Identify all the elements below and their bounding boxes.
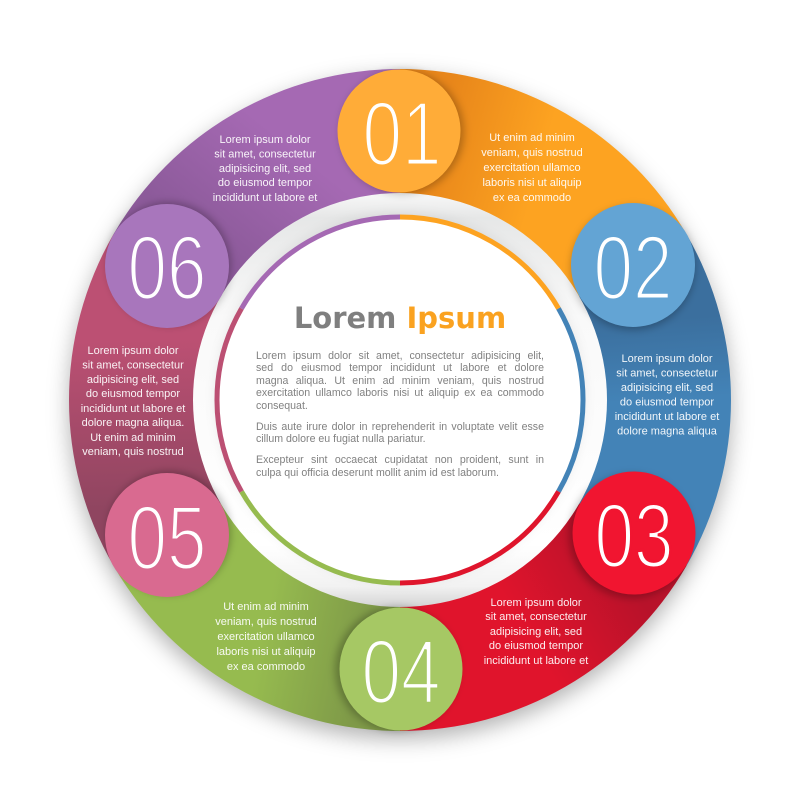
segment text: purple: adipisicing elit, sed xyxy=(219,163,311,175)
badge 06: 06 xyxy=(128,218,206,319)
segment: maroon xyxy=(69,234,222,566)
segment text: purple: incididunt ut labore et xyxy=(213,192,317,204)
centre body text: consequat. xyxy=(256,400,308,412)
segment: green xyxy=(113,503,400,731)
segment text: red: do eiusmod tempor xyxy=(489,640,583,652)
badge 03 xyxy=(569,472,696,598)
badge 03: 03 xyxy=(595,486,673,587)
segment: orange xyxy=(400,69,687,297)
segment text: maroon: adipisicing elit, sed xyxy=(87,374,179,386)
ring drop shadow xyxy=(69,77,731,739)
segment text: blue: incididunt ut labore et xyxy=(615,411,719,423)
segment text: orange: veniam, quis nostrud xyxy=(481,147,583,159)
badge 02 xyxy=(571,203,695,330)
segment text: green: veniam, quis nostrud xyxy=(215,616,317,628)
segment text: blue: sit amet, consectetur xyxy=(616,368,718,380)
segment: blue xyxy=(578,234,731,566)
segment text: blue: adipisicing elit, sed xyxy=(621,382,713,394)
title: Lorem Ipsum xyxy=(294,301,506,335)
centre body text: magna aliqua. Ut enim ad minim veniam, quis nostrud xyxy=(256,375,544,387)
badge 04: 04 xyxy=(362,622,440,723)
segment text: maroon: veniam, quis nostrud xyxy=(82,446,184,458)
segment text: red: incididunt ut labore et xyxy=(484,655,588,667)
coloured inner ring xyxy=(217,217,583,583)
segment text: orange: Ut enim ad minim xyxy=(489,132,575,144)
segment text: maroon: Ut enim ad minim xyxy=(90,432,176,444)
centre body text: Excepteur sint occaecat cupidatat non proident, sunt in xyxy=(256,454,544,466)
segment text: green: ex ea commodo xyxy=(227,661,305,673)
badge 01: 01 xyxy=(363,84,441,185)
centre body text: exercitation ullamco laboris nisi ut aliquip ex ea commodo xyxy=(256,387,544,399)
badge 05: 05 xyxy=(128,488,206,589)
segment text: orange: exercitation ullamco xyxy=(483,162,581,174)
segment text: blue: do eiusmod tempor xyxy=(620,396,714,408)
segment text: green: exercitation ullamco xyxy=(217,631,315,643)
segment text: purple: sit amet, consectetur xyxy=(214,148,316,160)
badge 05 xyxy=(105,471,231,597)
central white disk xyxy=(193,193,607,607)
segment text: blue: Lorem ipsum dolor xyxy=(621,353,713,365)
centre body text: Lorem ipsum dolor sit amet, consectetur adipisicing elit, xyxy=(256,350,544,362)
segment text: purple: Lorem ipsum dolor xyxy=(219,134,311,146)
badge 01 xyxy=(338,70,464,194)
segment: purple xyxy=(113,69,400,297)
segment ring xyxy=(69,69,731,731)
segment text: maroon: sit amet, consectetur xyxy=(82,360,184,372)
segment text: orange: laboris nisi ut aliquip xyxy=(482,177,582,189)
segment text: red: Lorem ipsum dolor xyxy=(490,597,582,609)
segment text: green: Ut enim ad minim xyxy=(223,601,309,613)
segment text: green: laboris nisi ut aliquip xyxy=(216,646,316,658)
centre body text: sed do eiusmod tempor incididunt ut labore et dolore xyxy=(256,362,544,374)
badge 02: 02 xyxy=(594,218,672,319)
segment text: maroon: incididunt ut labore et xyxy=(81,403,185,415)
segment text: red: sit amet, consectetur xyxy=(485,611,587,623)
centre body text: culpa qui officia deserunt mollit anim id est laborum. xyxy=(256,467,499,479)
segment text: red: adipisicing elit, sed xyxy=(490,626,582,638)
segment text: maroon: do eiusmod tempor xyxy=(86,388,180,400)
segment: red xyxy=(400,503,687,731)
centre body text: Duis aute irure dolor in reprehenderit in voluptate velit esse xyxy=(256,421,544,433)
centre body text xyxy=(256,350,544,479)
segment text: blue: dolore magna aliqua xyxy=(617,426,718,438)
segment text: maroon: Lorem ipsum dolor xyxy=(87,345,179,357)
segment text: purple: do eiusmod tempor xyxy=(218,177,312,189)
segment text: orange: ex ea commodo xyxy=(493,192,571,204)
badge 06 xyxy=(105,202,231,328)
segment text: maroon: dolore magna aliqua. xyxy=(82,417,184,429)
badge 04 xyxy=(335,607,462,731)
centre body text: cillum dolore eu fugiat nulla pariatur. xyxy=(256,433,426,445)
